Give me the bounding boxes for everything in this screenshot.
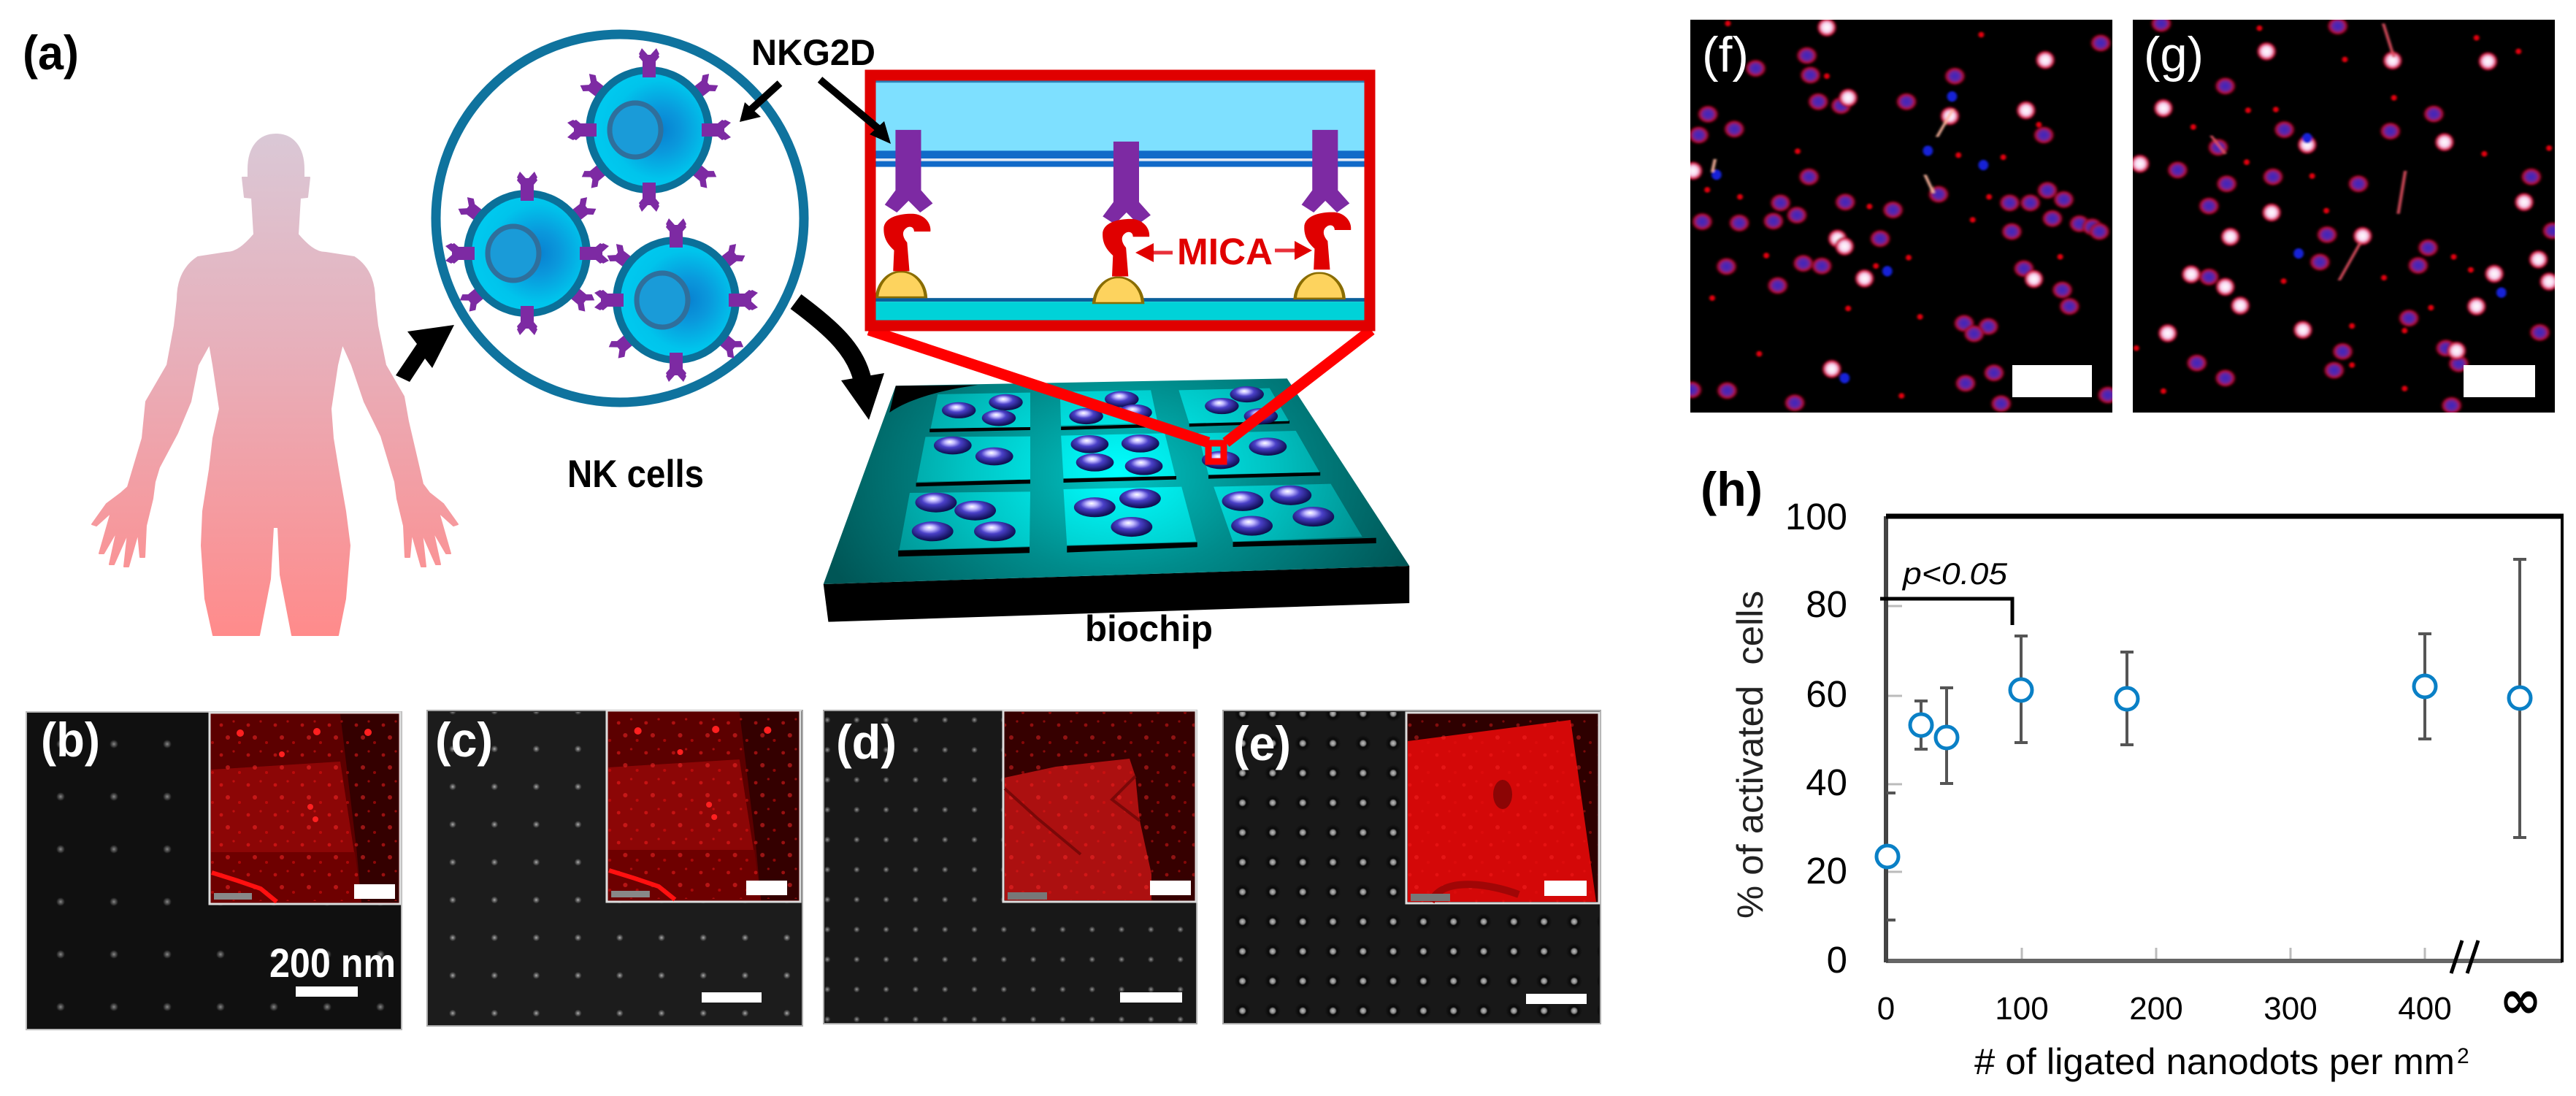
NK cell: top <box>567 48 731 212</box>
y axis title: % of activated cells <box>1730 591 1771 919</box>
inset: red fluorescence (e) <box>1406 713 1599 903</box>
x axis title: 2 <box>2457 1044 2469 1068</box>
panel label (h): (h) <box>1701 462 1763 516</box>
arrow: body to NK cells <box>396 325 454 382</box>
y axis tick labels: 20 <box>1806 850 1847 892</box>
y axis tick labels: 100 <box>1785 496 1847 537</box>
panel: synapse detail inset <box>870 75 1370 326</box>
scale bar: inset (e) <box>1544 881 1587 896</box>
y axis tick labels: 80 <box>1806 583 1847 625</box>
y axis tick labels: 60 <box>1806 673 1847 715</box>
x axis tick labels: 300 <box>2263 991 2318 1027</box>
y axis tick labels <box>1785 496 1847 981</box>
scale bar: main (d) <box>1120 992 1182 1003</box>
panel label (e): (e) <box>1233 716 1291 770</box>
label: MICA with arrows <box>1135 231 1312 272</box>
data points <box>1877 675 2531 867</box>
significance bracket <box>1880 599 2012 625</box>
x axis tick labels: 400 <box>2398 991 2452 1027</box>
chart: % activated cells vs ligated nanodots <box>1730 496 2564 1082</box>
NK cells circle <box>436 34 804 402</box>
error bars <box>1887 559 2526 920</box>
significance label: p<0.05 <box>1901 556 2008 591</box>
x axis tick labels: 100 <box>1995 991 2049 1027</box>
scale bar (g) <box>2464 365 2535 397</box>
scale bar: main (e) <box>1526 994 1587 1004</box>
panel: fluorescence image (f) <box>1680 17 2119 413</box>
scale label: 200 nm: 200 nm <box>269 940 396 986</box>
x axis tick labels <box>1877 991 2452 1027</box>
inset: red fluorescence (b) <box>210 713 400 904</box>
NK cell: left <box>445 172 609 335</box>
x axis tick labels: 200 <box>2129 991 2183 1027</box>
scale bar: main (b) <box>296 986 358 997</box>
panel label (c): (c) <box>435 713 493 767</box>
panel label (b): (b) <box>41 713 100 767</box>
label: NKG2D: NKG2D <box>751 32 875 73</box>
scale bar: inset (d) <box>1150 881 1191 895</box>
axis break mark <box>2451 940 2478 973</box>
scale bar: inset (c) <box>746 881 787 895</box>
icon: human body silhouette <box>92 134 458 635</box>
panel label (d): (d) <box>836 715 897 769</box>
label: NK cells: NK cells <box>567 453 704 496</box>
y axis tick labels: 0 <box>1827 939 1847 981</box>
chart axes and frame <box>1886 516 2564 962</box>
y axis tick labels: 40 <box>1806 762 1847 803</box>
label: biochip: biochip <box>1085 608 1213 649</box>
inset: red fluorescence (c) <box>607 710 800 902</box>
panel: micrograph (c) <box>427 710 802 1026</box>
scale bar (f) <box>2012 365 2092 397</box>
scale bar: inset (b) <box>354 884 395 899</box>
arrows: NKG2D pointers <box>740 80 891 144</box>
x axis title: # of ligated nanodots per mm <box>1974 1041 2455 1082</box>
label: MICA with arrows: MICA <box>1177 231 1273 272</box>
panel: micrograph (b) <box>26 712 402 1030</box>
infinity label: ∞ <box>2499 969 2542 1030</box>
inset: red fluorescence (d) <box>1003 710 1196 902</box>
panel: fluorescence image (g) <box>2129 14 2564 415</box>
x axis tick labels: 0 <box>1877 991 1895 1027</box>
panel label (a): (a) <box>23 26 79 80</box>
arrow: NK cells to biochip <box>796 302 884 420</box>
panel: micrograph (e) <box>1223 710 1601 1024</box>
panel: micrograph (d) <box>824 710 1197 1024</box>
NK cell: right <box>594 218 758 382</box>
panel label (f): (f) <box>1702 27 1749 83</box>
scale bar: main (c) <box>702 992 762 1003</box>
biochip <box>824 378 1409 622</box>
panel label (g): (g) <box>2144 27 2204 83</box>
zoom lines to chip <box>869 330 1371 461</box>
